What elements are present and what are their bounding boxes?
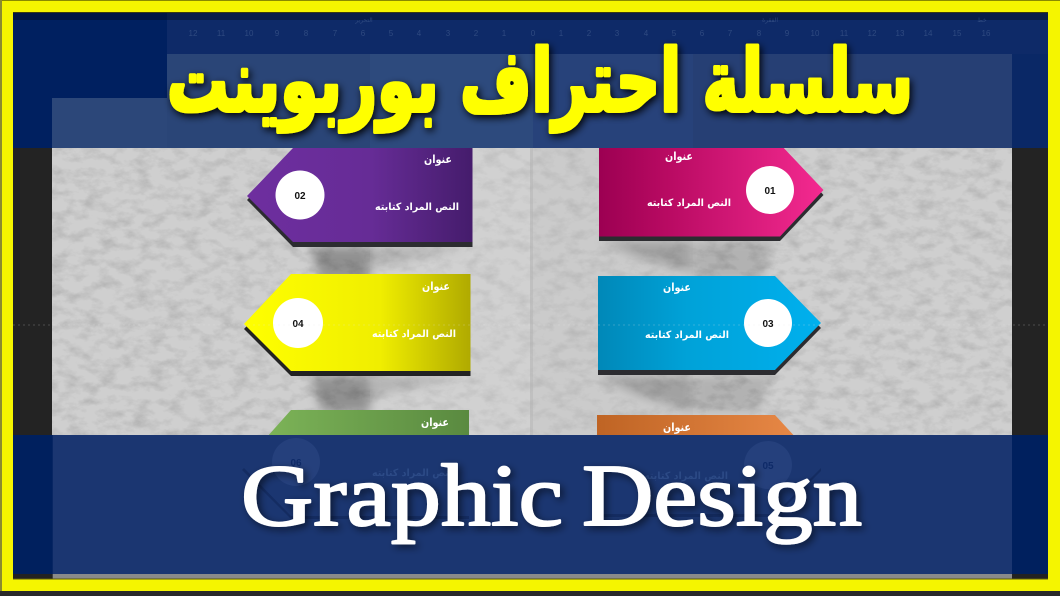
ruler labels: 5 xyxy=(389,29,394,38)
faded card 05 remnants xyxy=(597,441,821,517)
ruler labels: 12 xyxy=(868,29,877,38)
ruler labels: الفقرة xyxy=(762,17,778,24)
ruler labels: 3 xyxy=(615,29,620,38)
subtitle: Graphic Design: Graphic xyxy=(241,448,563,545)
ruler labels: 3 xyxy=(446,29,451,38)
bottom navy banner xyxy=(13,435,1048,579)
ruler labels: 8 xyxy=(757,29,762,38)
faded card 06 remnants: 06 xyxy=(290,458,302,469)
ruler labels: 1 xyxy=(559,29,564,38)
faded card 05 remnants: 05 xyxy=(762,461,774,472)
arrow card 04: yellow xyxy=(244,274,470,376)
ruler labels: خط xyxy=(977,17,987,24)
arrow card 03: blue xyxy=(598,276,821,375)
ruler labels: 2 xyxy=(474,29,479,38)
arrow card 05: orange xyxy=(597,415,821,519)
ruler labels: 5 xyxy=(672,29,677,38)
ruler labels: 6 xyxy=(700,29,705,38)
ruler labels: 0 xyxy=(531,29,536,38)
cast shadows on wall xyxy=(310,241,775,412)
ruler labels: 6 xyxy=(361,29,366,38)
ruler labels: 7 xyxy=(728,29,733,38)
arrow card 06: green xyxy=(242,410,469,521)
ruler labels: 4 xyxy=(644,29,649,38)
ruler labels: 13 xyxy=(896,29,905,38)
ruler labels: 16 xyxy=(982,29,991,38)
ruler labels: 2 xyxy=(587,29,592,38)
card 01 body: النص المراد كتابته xyxy=(647,198,731,209)
card 02 body: النص المراد كتابته xyxy=(375,202,459,213)
number badge 03 xyxy=(744,299,792,347)
number badge 01 xyxy=(746,166,794,214)
ruler labels: 9 xyxy=(785,29,790,38)
subtitle: Graphic Design: Design xyxy=(582,448,862,545)
concrete wall background xyxy=(52,100,1012,596)
ruler labels: 11 xyxy=(217,29,226,38)
arrow card 02: purple xyxy=(247,148,472,247)
ruler labels xyxy=(189,17,991,38)
ruler labels: 12 xyxy=(189,29,198,38)
faded card 06 remnants: النص المراد كتابته xyxy=(372,468,456,479)
number badge 04: 04 xyxy=(292,319,304,330)
ruler labels: 10 xyxy=(245,29,254,38)
ruler labels: 7 xyxy=(333,29,338,38)
faded card 06 remnants xyxy=(242,438,469,519)
arrow card 01: pink xyxy=(599,144,824,241)
card 03 body: النص المراد كتابته xyxy=(645,330,729,341)
ruler labels: 15 xyxy=(953,29,962,38)
card 05 heading: عنوان xyxy=(663,421,691,434)
card 02 heading: عنوان xyxy=(424,153,452,166)
faint horizontal guide xyxy=(13,324,1048,326)
ruler labels: 1 xyxy=(502,29,507,38)
card 06 heading: عنوان xyxy=(421,416,449,429)
number badge 03: 03 xyxy=(762,319,774,330)
ruler labels: 14 xyxy=(924,29,933,38)
top navy banner xyxy=(13,13,1048,148)
subtitle: Graphic Design xyxy=(241,448,862,545)
number badge 04 xyxy=(273,298,323,348)
card 03 heading: عنوان xyxy=(663,281,691,294)
ruler labels: 11 xyxy=(840,29,849,38)
ruler labels: 10 xyxy=(811,29,820,38)
faded card 05 remnants: النص المراد كتابته xyxy=(644,471,728,482)
ruler labels: 4 xyxy=(417,29,422,38)
card 04 body: النص المراد كتابته xyxy=(372,329,456,340)
card 04 heading: عنوان xyxy=(422,280,450,293)
number badge 02 xyxy=(276,170,324,220)
number badge 01: 01 xyxy=(764,186,776,197)
ruler labels: التحرير xyxy=(354,17,373,24)
card 01 heading: عنوان xyxy=(665,150,693,163)
ruler labels: 8 xyxy=(304,29,309,38)
ruler labels: 9 xyxy=(275,29,280,38)
number badge 02: 02 xyxy=(294,191,306,202)
